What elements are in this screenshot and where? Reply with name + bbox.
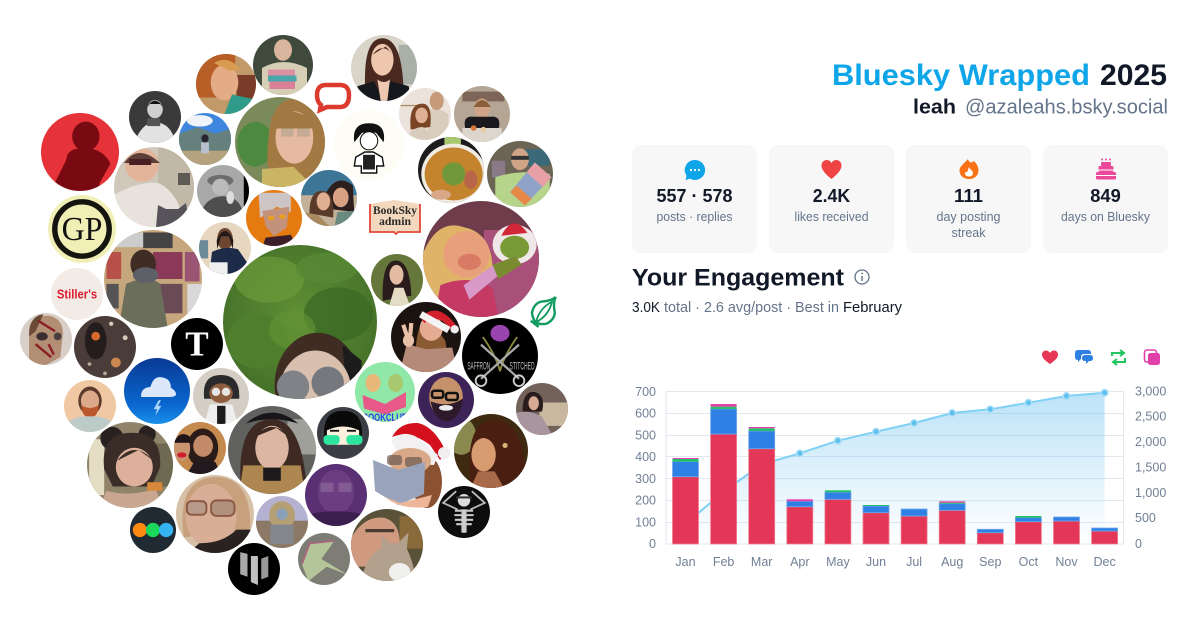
icon: legend repost: [1112, 350, 1125, 365]
avatar: zombie makeup: [20, 313, 72, 365]
right axis labels: 3,000: [1135, 384, 1166, 398]
avatar: W logo: [228, 543, 280, 595]
avatar: black and white man in hat: [197, 165, 252, 217]
icon: onion logo: [526, 290, 564, 331]
avatar: bearded man with glasses: [418, 372, 474, 428]
month labels: Jul: [906, 555, 922, 569]
line points: [797, 390, 1108, 456]
avatar: older woman with glasses: [176, 475, 254, 553]
avatar: woman with hair buns: [87, 422, 175, 508]
bars: likes: [672, 434, 1118, 544]
stat value: 2.4K: [813, 185, 851, 206]
title: Bluesky Wrapped: [832, 59, 1090, 92]
avatar: skeleton: [438, 486, 490, 538]
left axis labels: 100: [635, 516, 656, 530]
icon: birthday cake: [1096, 158, 1116, 180]
icon: legend like: [1042, 350, 1058, 364]
left axis labels: 300: [635, 472, 656, 486]
avatar: illustrated brunette: [351, 35, 419, 101]
panel: posts and replies: [632, 145, 757, 253]
icon: red speech bubble: [317, 85, 349, 110]
avatar: man holding books: [487, 141, 553, 207]
avatar: orange illustrated character: [246, 190, 302, 246]
avatar: woman with glasses and plants: [235, 97, 330, 187]
left axis labels: [635, 385, 656, 551]
right axis labels: [1135, 384, 1166, 551]
avatar: blue cloud logo: [124, 358, 190, 424]
avatar: GP logo: GP: [62, 211, 102, 248]
avatar: dark sparkles: [74, 316, 136, 378]
avatar: GP logo: [48, 195, 116, 263]
avatar: NYT logo: T: [185, 324, 209, 363]
bars: quotes: [672, 404, 965, 503]
left axis labels: 500: [635, 428, 656, 442]
bars: reposts: [672, 407, 1041, 518]
title: 2025: [1100, 59, 1167, 92]
stat label: day posting: [936, 209, 1000, 224]
right axis labels: 2,500: [1135, 410, 1166, 424]
icon: BookSky admin book: BookSky: [373, 205, 417, 217]
panel: days on Bluesky: [1043, 145, 1168, 253]
avatar: woman with long hair in car: [228, 406, 318, 494]
icon: info: [855, 270, 869, 284]
user name and handle: @azaleahs.bsky.social: [965, 96, 1168, 118]
avatar: woman with orange hair: [196, 54, 260, 114]
avatar: man carrying books: [253, 35, 313, 95]
avatar: purple toned portrait: [305, 464, 367, 526]
stat label: posts · replies: [656, 209, 733, 224]
avatar: woman on sofa: [516, 383, 568, 435]
avatar: Miss Piggy and green character: [423, 201, 539, 317]
avatar: illustrated woman with glasses: [193, 368, 249, 424]
avatar: metal owl: [256, 496, 308, 549]
engagement summary: February: [843, 300, 903, 316]
panel: day posting streak: streak: [952, 225, 986, 240]
chart: monthly engagement: [635, 384, 1166, 569]
heading: Your Engagement: Your Engagement: [632, 264, 844, 292]
month labels: Feb: [713, 555, 734, 569]
month labels: Aug: [941, 555, 963, 569]
avatar: Stiller's logo: [51, 268, 103, 320]
month labels: May: [826, 555, 850, 569]
engagement summary: 3.0K: [632, 300, 660, 316]
month labels: Apr: [790, 555, 810, 569]
right axis labels: 500: [1135, 511, 1156, 525]
left axis labels: 0: [649, 537, 656, 551]
month labels: Dec: [1093, 555, 1116, 569]
avatar: couple on the beach: [301, 170, 357, 226]
cumulative area: [686, 393, 1105, 544]
month labels: Jan: [675, 555, 696, 569]
avatar: memoji with green glasses: [317, 407, 369, 459]
avatar: red bearded man: [64, 380, 116, 432]
left axis labels: 200: [635, 494, 656, 508]
engagement summary: [632, 300, 903, 316]
avatar: santa hat character reading: [373, 423, 450, 508]
month labels: Mar: [751, 555, 772, 569]
stat label: days on Bluesky: [1061, 209, 1150, 224]
avatar: woman in santa hat making peace sign: [391, 302, 461, 372]
panel: day posting streak: [906, 145, 1031, 253]
avatar: large grass selfie: [223, 245, 377, 399]
icon: flame: [960, 159, 978, 179]
right axis labels: 1,500: [1135, 460, 1166, 474]
left axis labels: 700: [635, 385, 656, 399]
month labels: Jun: [866, 555, 886, 569]
month labels: Oct: [1019, 555, 1039, 569]
avatar: cartoon girl in overalls: [334, 110, 404, 180]
avatar: mountain valley: [179, 113, 231, 166]
avatar: woman in dark blazer: [199, 222, 251, 275]
avatar: Saffron Stitched logo: [462, 318, 538, 394]
month labels: Sep: [979, 555, 1001, 569]
avatar: luna moth: [298, 533, 350, 585]
icon: legend reply: [1075, 350, 1093, 364]
bars: replies: [672, 409, 1118, 533]
panel: likes received: [769, 145, 894, 253]
stat label: likes received: [794, 209, 868, 224]
avatar: red shadow: [41, 113, 119, 191]
avatar: couple embracing: [399, 88, 451, 140]
panel: avatar cloud: [20, 35, 568, 595]
left axis labels: 400: [635, 450, 656, 464]
right axis labels: 0: [1135, 537, 1142, 551]
avatar: woman with grey cat: [114, 147, 198, 227]
icon: BookSky admin book: admin: [379, 216, 412, 228]
user name and handle: leah: [913, 96, 956, 118]
avatar: bookclub cartoon: [355, 362, 415, 424]
left axis labels: 600: [635, 406, 656, 420]
avatar: man with tabby cat: [351, 509, 425, 581]
avatar: black and white reader: [129, 91, 181, 143]
avatar: curly haired woman: [447, 414, 528, 488]
avatar: woman with dark hair among leaves: [371, 254, 423, 306]
chart legend icons: [1042, 350, 1160, 365]
right axis labels: 2,000: [1135, 435, 1166, 449]
icon: heart: [822, 160, 842, 179]
avatar: two women selfie: [173, 422, 226, 474]
icon: BookSky admin book: [370, 200, 420, 234]
icon: chat bubble: [685, 160, 705, 180]
cumulative line: [686, 393, 1105, 524]
icon: legend quote: [1144, 350, 1160, 365]
avatar: NYT logo: [171, 318, 223, 370]
stat value: 849: [1090, 185, 1121, 206]
month labels: Nov: [1055, 555, 1078, 569]
month labels: [675, 555, 1116, 569]
avatar: three dots logo: [130, 507, 176, 553]
avatar: man in leather jacket: [454, 86, 510, 145]
right axis labels: 1,000: [1135, 486, 1166, 500]
stat value: 557 · 578: [656, 185, 732, 206]
avatar: bookshelf and cat: [104, 230, 202, 328]
engagement summary: total · 2.6 avg/post · Best in: [664, 300, 839, 316]
stat value: 111: [954, 185, 983, 206]
avatar: pho soup: [418, 137, 486, 204]
